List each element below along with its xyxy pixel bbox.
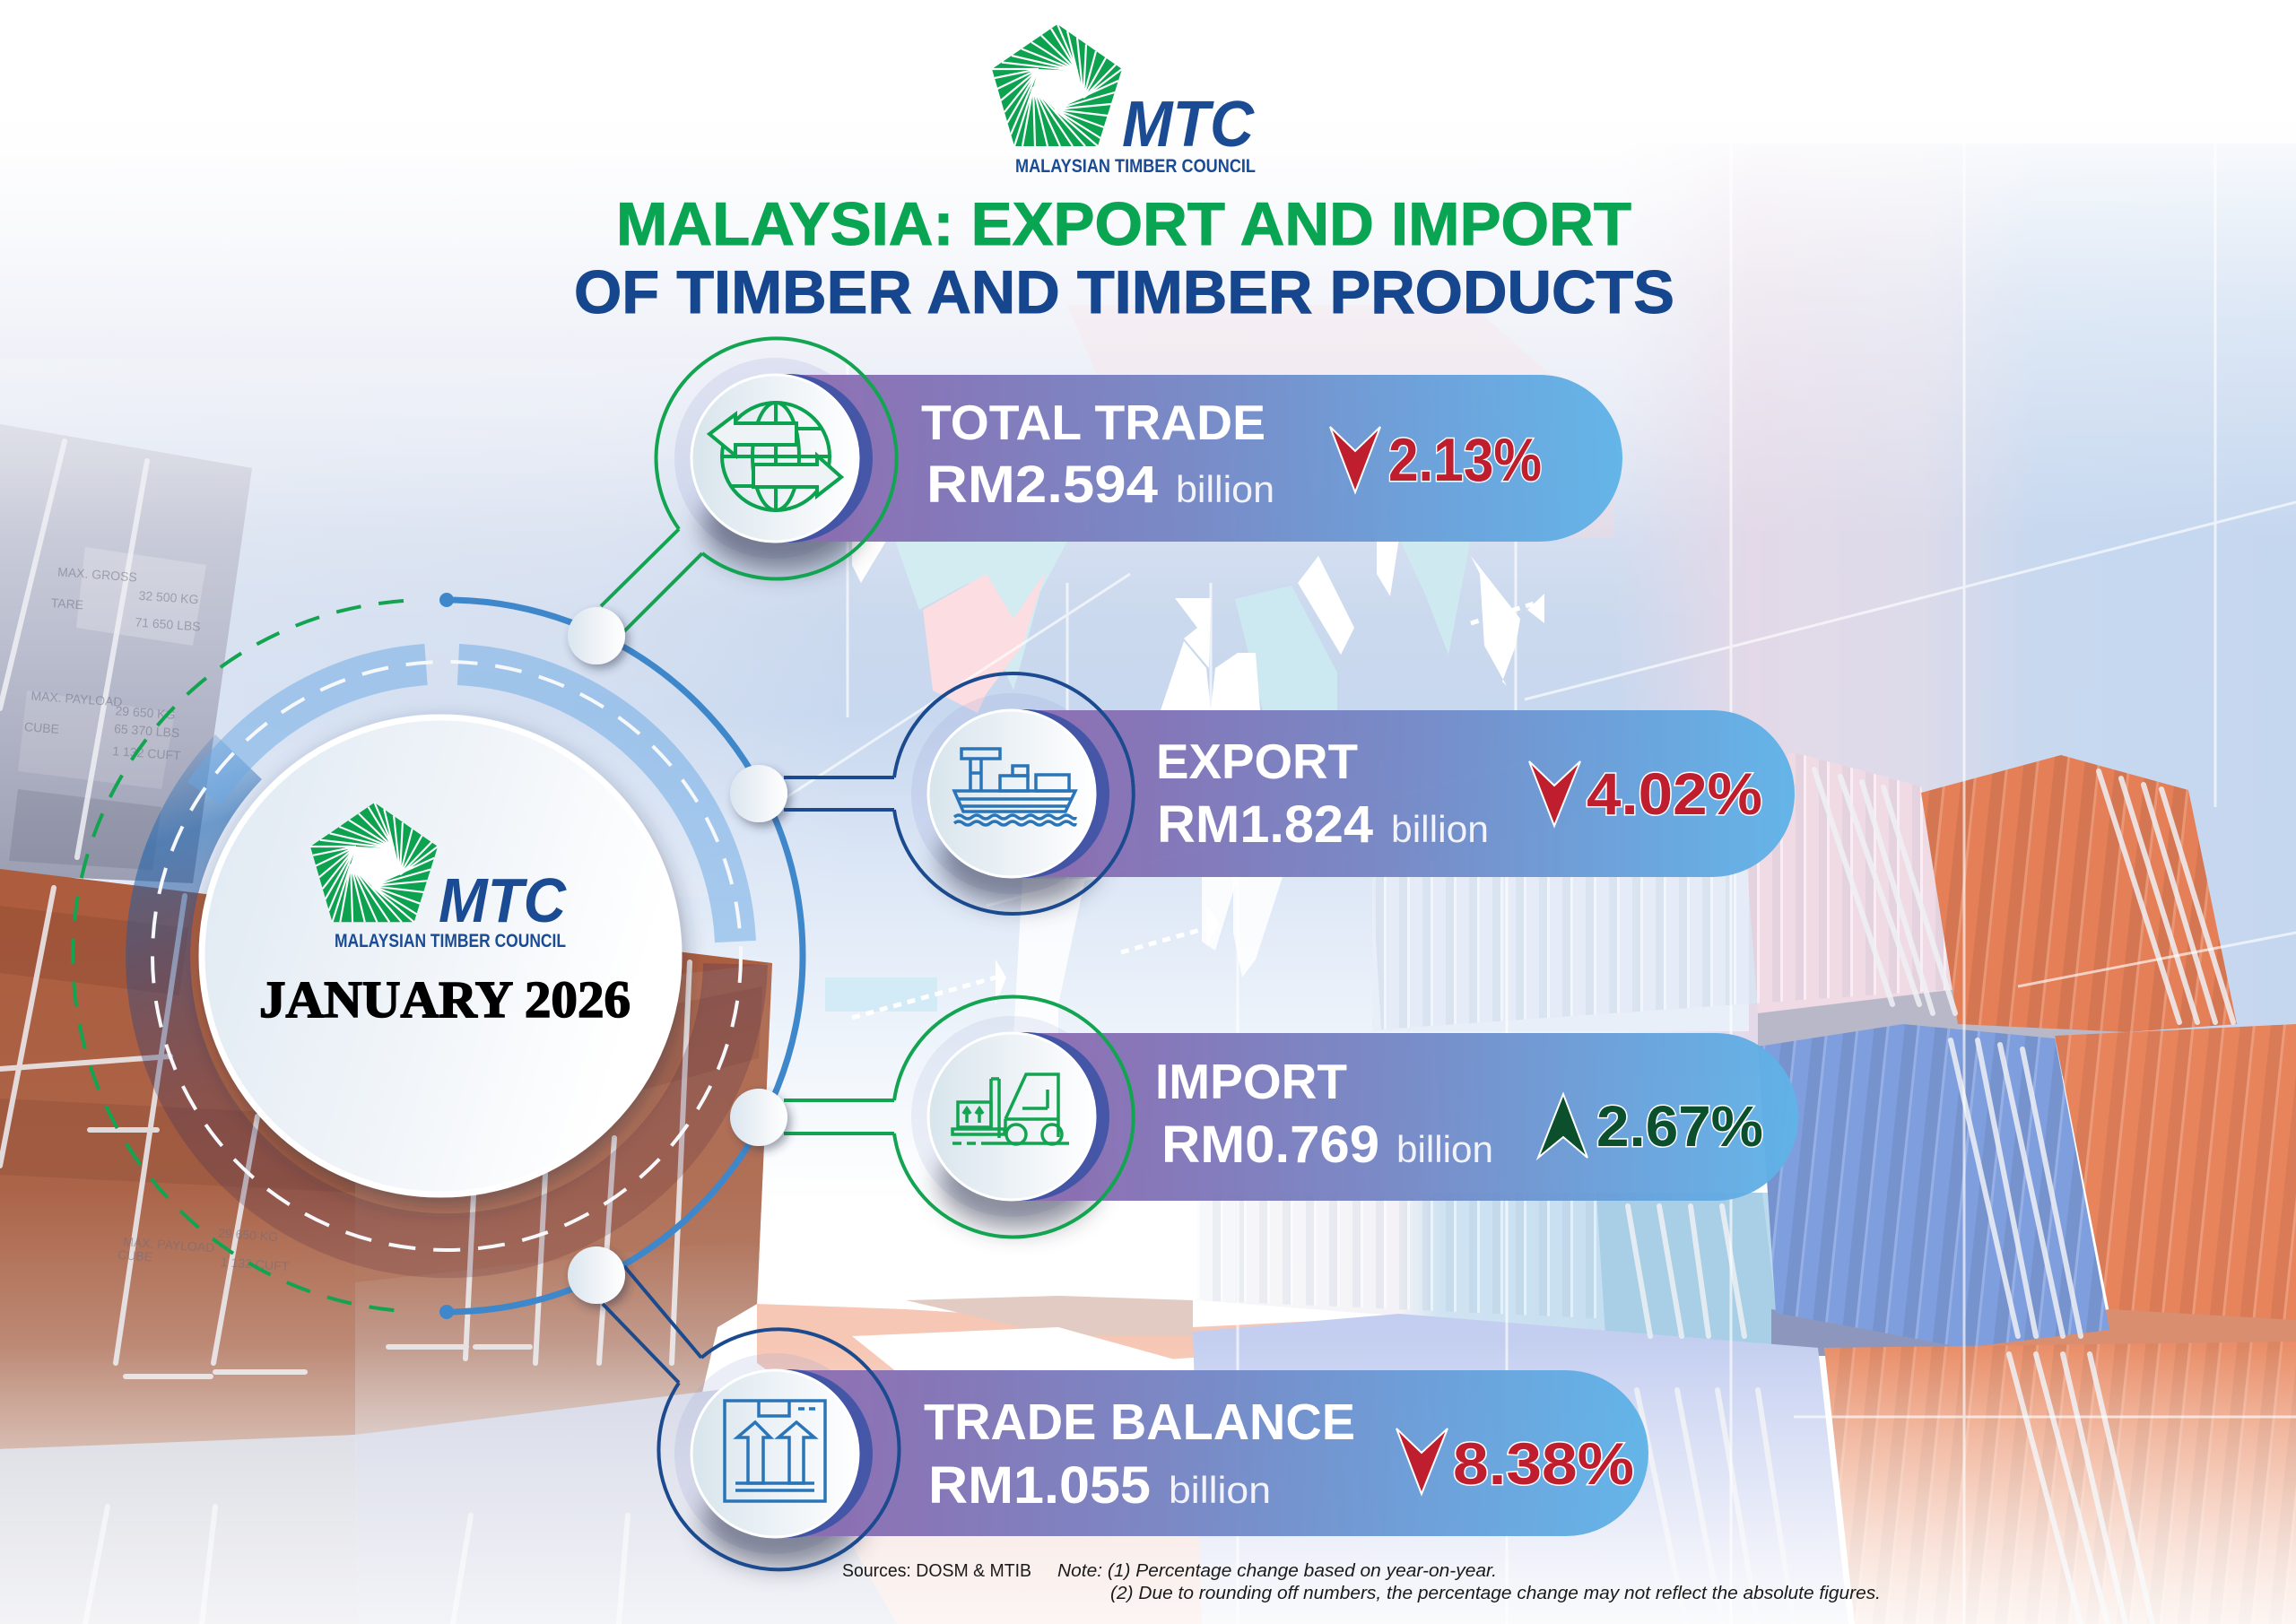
- icon: down arrow: [1330, 427, 1380, 492]
- unit: billion: [1176, 468, 1274, 510]
- panel: total trade: [601, 338, 1622, 631]
- title: OF TIMBER AND TIMBER PRODUCTS: [574, 258, 1674, 326]
- icon: up arrow: [1538, 1094, 1587, 1158]
- icon: forklift: [952, 1074, 1069, 1144]
- center rings: decorative arcs: [73, 593, 803, 1319]
- panel: export: [784, 673, 1795, 914]
- top logo: MTC: [1122, 89, 1255, 161]
- label: IMPORT: [1155, 1054, 1347, 1109]
- grey and brown left containers: [0, 424, 252, 883]
- container stencil text: 32 500 KG: [138, 588, 199, 606]
- container stencil text: 1 132 CUFT: [220, 1255, 290, 1273]
- sources and notes: Note: (1) Percentage change based on year-on-year.: [1057, 1561, 1497, 1581]
- sources and notes: Sources: DOSM & MTIB: [842, 1561, 1031, 1581]
- container rods: [0, 441, 2233, 1624]
- icon: MTC logo in circle: MALAYSIAN TIMBER COUNCIL: [335, 931, 566, 951]
- icon: MTC logo in circle: MTC: [439, 865, 567, 935]
- unit: billion: [1391, 808, 1489, 850]
- value: RM1.055: [928, 1456, 1151, 1515]
- container stencil text: 1 132 CUFT: [112, 743, 182, 762]
- pale side containers: [1372, 879, 1749, 1031]
- label: TOTAL TRADE: [921, 395, 1265, 450]
- percent change: 4.02%: [1587, 760, 1762, 827]
- icon: down arrow: [1396, 1429, 1448, 1494]
- container stencil text: MAX. PAYLOAD: [123, 1234, 215, 1255]
- container stencil text: MAX. PAYLOAD: [30, 689, 123, 709]
- container stencil text: 71 650 LBS: [135, 615, 201, 634]
- container stencil text: MAX. GROSS: [57, 564, 137, 585]
- container stencil text: 65 370 LBS: [114, 721, 180, 740]
- percent change: 2.67%: [1596, 1094, 1763, 1159]
- icon: down arrow: [1529, 761, 1580, 826]
- icon: cargo ship: [954, 749, 1075, 825]
- unit: billion: [1396, 1128, 1493, 1170]
- container stencil text: TARE: [50, 595, 84, 612]
- icon: globe with arrows: [709, 403, 841, 510]
- top logo: [992, 24, 1256, 177]
- title: MALAYSIA: EXPORT AND IMPORT: [616, 190, 1631, 258]
- top logo: MALAYSIAN TIMBER COUNCIL: [1015, 156, 1256, 177]
- container stencil text: CUBE: [117, 1247, 153, 1264]
- panel: import: [784, 997, 1798, 1238]
- connector nodes: [568, 607, 787, 1304]
- unit: billion: [1169, 1469, 1271, 1511]
- percent change: 8.38%: [1453, 1430, 1634, 1497]
- lower middle container lids: [757, 1304, 1372, 1399]
- value: RM2.594: [926, 456, 1158, 514]
- container stencil text: 29 650 KG: [115, 703, 176, 722]
- percent change: 2.13%: [1388, 426, 1542, 494]
- icon: MTC logo in circle: [310, 803, 567, 951]
- label: TRADE BALANCE: [924, 1394, 1355, 1451]
- world map fragments: [825, 305, 1614, 1036]
- value: RM0.769: [1161, 1116, 1379, 1174]
- value: RM1.824: [1157, 795, 1373, 854]
- central date circle: [202, 717, 679, 1194]
- title: [574, 190, 1674, 326]
- sources and notes: [842, 1561, 1881, 1603]
- sources and notes: (2) Due to rounding off numbers, the percentage change may not reflect the absolute figures.: [1110, 1584, 1881, 1603]
- label: EXPORT: [1156, 734, 1358, 789]
- container stencil text: CUBE: [24, 719, 60, 736]
- panel: trade balance: [603, 1266, 1648, 1569]
- thin grid lines: [771, 143, 2296, 1624]
- container stencil text: 29 650 KG: [218, 1226, 279, 1244]
- month label: JANUARY 2026: [259, 970, 631, 1029]
- container stencil text: [0, 563, 337, 1273]
- icon: package with up arrows: [725, 1401, 825, 1501]
